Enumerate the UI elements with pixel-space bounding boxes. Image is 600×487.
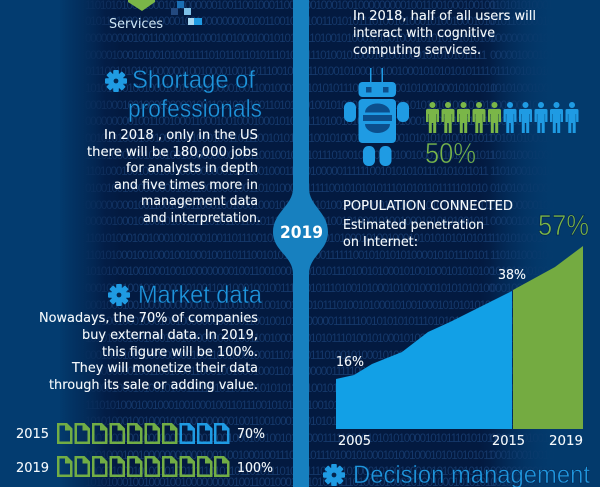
text block: market body: through its sale or adding value. bbox=[49, 377, 258, 393]
binary code texture: 000100010010000000001001100100010001110101011101001010001010010001010101010110 bbox=[85, 350, 494, 362]
stat: 57%: 57% bbox=[538, 210, 589, 242]
icon: green arrow bbox=[128, 0, 155, 11]
binary code texture: 000100010010000000001001100100010010011101010111010010100010100100010101010100 bbox=[85, 283, 495, 295]
icon: pixel squares bbox=[171, 1, 202, 25]
binary code texture: 000001000101001010011111010110110101110101011101001010001010010001010101011111 bbox=[85, 50, 487, 62]
binary code texture: 111010100010010001001000100110111001010111010010100010100100010101010101001011 bbox=[85, 400, 492, 412]
binary code texture: 110101000100100010010001001101110010101011101001010001010010001010101010101011 bbox=[85, 233, 493, 245]
area: 2005-2015 bbox=[336, 291, 512, 429]
binary code texture: 101010001001000100100000000010011001000111010101110100101000101001000101010101 bbox=[85, 416, 495, 428]
text block: cognitive computing: computing services. bbox=[353, 42, 481, 58]
chart: people 50% bbox=[425, 102, 578, 170]
text block: cognitive computing bbox=[353, 8, 536, 58]
text block: cognitive computing: interact with cognitive bbox=[353, 25, 495, 41]
binary code texture: 101010001001000100100000000010011001001010101110100101000101001000101010101011 bbox=[85, 150, 495, 162]
chart: documents 2015 bbox=[16, 423, 265, 444]
binary code texture: 000100010010000000000010011001000100100101010111010010100010100100010101010101 bbox=[85, 300, 496, 312]
binary code texture: 000001000101001010011111010110110101110101011101001010001010010001010101001011 bbox=[85, 216, 489, 228]
binary code texture: 110100010010001001000000000100110010001101010000011111100101010101110101011011 bbox=[85, 166, 489, 178]
binary code texture: 000000000100110010001100010010001000101010111010010100010100100010101010010111 bbox=[85, 200, 494, 212]
icon: robot bbox=[344, 68, 409, 166]
text block: market body: They will monetize their data bbox=[71, 360, 258, 376]
stat: 50%: 50% bbox=[425, 138, 476, 170]
chart: population connected: 2005 bbox=[338, 433, 371, 449]
area: 2015-2019 bbox=[513, 246, 583, 429]
binary code texture: 101010001001000100100000000010011001000111010101110100101000101001000101010100 bbox=[85, 266, 495, 278]
binary code texture: 011100101010100000010010000100110111001010111010010100010100100010101010101111 bbox=[85, 66, 490, 78]
chart: documents 2015: 2015 bbox=[16, 426, 49, 442]
binary code texture: 000000000100110010001100010010001000101010111010010100010100100010101010010110 bbox=[85, 116, 495, 128]
text block: shortage body: management data bbox=[141, 193, 258, 209]
text block: shortage body: there will be 180,000 jobs bbox=[87, 144, 258, 160]
binary code texture: 110101000100100010010001001101110010101010000011111100101010101000010101110101 bbox=[85, 250, 489, 262]
heading: population connected: POPULATION CONNECTED bbox=[343, 198, 513, 214]
binary code texture: 001010100010010001001000100110111001010111010010100010100100010101010100101011 bbox=[85, 133, 494, 145]
heading: population connected: on Internet: bbox=[343, 234, 418, 250]
binary code texture: 000100010010000000000010011001000100111010101110100101000101001000101010101011 bbox=[85, 450, 494, 462]
binary code texture: 110101010001000101000000010011001000110001001000100100000000010011001000100100 bbox=[85, 0, 495, 12]
heading: Shortage of professionals: Shortage of bbox=[132, 66, 255, 94]
binary code texture: 000100010010000000001001100100010011010111010010100010100100010101010100101011 bbox=[85, 100, 495, 112]
heading: Shortage of professionals bbox=[128, 66, 262, 123]
binary code texture: 010110100010010000100100000000010011001000100110101011101001010001010010001010 bbox=[85, 16, 495, 28]
text block: shortage body: In 2018 , only in the US bbox=[104, 127, 258, 143]
central timeline with 2019 marker bbox=[273, 0, 328, 487]
chart: documents 2015: 70% bbox=[237, 426, 265, 442]
chart: population connected: 38% bbox=[498, 267, 526, 283]
chart: documents 2019 bbox=[16, 456, 273, 477]
text block: market body: Nowadays, the 70% of companies bbox=[39, 310, 258, 326]
binary code texture: 101010001001000100100000000010011001000100101010111010010100010100100010101010 bbox=[85, 83, 496, 95]
text block: shortage body: for analysts in depth bbox=[126, 160, 258, 176]
label: Services: Services bbox=[109, 16, 163, 32]
binary code texture: 010100100010001001000000000100110010010101000001111110010101010111010101101011 bbox=[85, 316, 490, 328]
heading: Market data: Market data bbox=[138, 281, 262, 309]
central timeline with 2019 marker: 2019 bbox=[280, 223, 323, 243]
panel: decision management bbox=[323, 461, 590, 487]
text block: market body: buy external data. In 2019, bbox=[82, 327, 258, 343]
heading: population connected: Estimated penetration bbox=[343, 217, 484, 233]
panel: shortage of professionals bbox=[87, 66, 262, 226]
text block: market body bbox=[39, 310, 258, 393]
binary code texture: 000000000100110010001100010010001000110101000001111100101010101000010101110101 bbox=[85, 366, 491, 378]
chart: population connected: 2019 bbox=[549, 433, 583, 449]
text block: shortage body: and interpretation. bbox=[143, 210, 261, 226]
binary code texture: 000001000101001010011111010110110101010111010010100010100100010101010101010101 bbox=[85, 383, 492, 395]
icon: gear bbox=[105, 70, 127, 92]
icon: gear bbox=[108, 284, 130, 306]
chart: population connected: 2015 bbox=[492, 433, 525, 449]
chart: documents 2019: 2019 bbox=[16, 460, 49, 476]
panel: market data bbox=[16, 281, 273, 477]
chart: population connected: 16% bbox=[336, 354, 364, 370]
binary code texture: 000000000100110010001100010010001001010101110100101000101001000101010101010101 bbox=[85, 33, 495, 45]
text block: shortage body: and five times more in bbox=[114, 177, 258, 193]
icon: gear bbox=[323, 464, 345, 486]
binary code texture: 101010001001000100100000000010011001000111010101110100101000101001000101010101 bbox=[85, 333, 495, 345]
binary code texture: 000001000101001010011111010110110101110101011101001010001010010001010101010110 bbox=[85, 466, 489, 478]
text block: shortage body bbox=[87, 127, 261, 226]
text block: market body: this figure will be 100%. bbox=[102, 344, 258, 360]
binary code texture: 010010010000000001001100100010011010100000111110010101010111010101101111101010 bbox=[85, 183, 488, 195]
heading: population connected bbox=[343, 198, 513, 250]
heading: Shortage of professionals: professionals bbox=[128, 95, 262, 123]
text block: cognitive computing: In 2018, half of all users will bbox=[353, 8, 536, 24]
chart: population connected bbox=[336, 198, 589, 449]
binary code texture: 000100010010000000001001100100010010010100000111110010101010100001010111010101 bbox=[85, 433, 493, 445]
chart: documents 2019: 100% bbox=[237, 460, 273, 476]
